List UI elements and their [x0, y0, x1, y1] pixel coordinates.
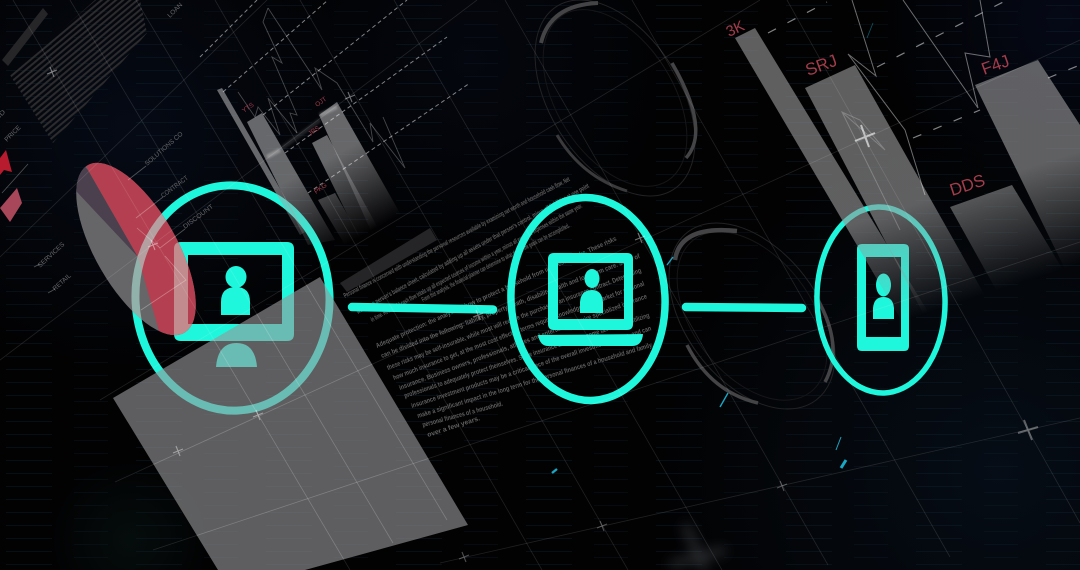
leader labels: RETAIL — [52, 272, 73, 292]
chart labels: 3K — [724, 17, 747, 41]
pie chart: tilted ellipse — [76, 162, 196, 336]
chart labels: SRJ — [803, 51, 840, 80]
leader labels: SERVICES — [37, 241, 67, 269]
text block: central paragraph: Personal finance is concerned with understanding the personal resources available by examining net worth and household cash flow. Net — [343, 176, 572, 300]
dashed chart guides — [200, 0, 1080, 193]
text block: central paragraph: how much insurance to get, at the most cost effective terms requires knowledge of the market for personal — [392, 281, 645, 382]
text block: central paragraph: can be divided into the following: liability, property, death, disability, health and long term care. Some of — [380, 253, 642, 360]
grid cross markers — [47, 67, 1038, 562]
chart labels — [241, 17, 1012, 200]
bar chart: right large — [735, 28, 1080, 340]
cyan sparks — [552, 23, 873, 473]
chart highlight bands — [267, 107, 337, 157]
node: laptop — [506, 194, 670, 404]
central paragraph header bar — [340, 228, 437, 292]
line chart: zigzags left — [238, 8, 405, 168]
ring: smartphone — [814, 205, 948, 395]
ring: laptop — [506, 194, 670, 404]
ring: desktop — [130, 180, 335, 416]
text block: central paragraph: these risks may be self-insurable, while most will require the purchase of an insurance contract. Determining — [386, 267, 642, 372]
chart labels: OJT — [314, 96, 328, 109]
leader labels: LOAN — [166, 2, 184, 19]
chart labels: DDS — [947, 171, 987, 200]
text block: central paragraph: in time. Household cash flow totals up all expected sources of income within a year, minus all expected expenses within the same year. — [370, 203, 584, 324]
node: desktop computer — [130, 180, 335, 416]
leader labels: DISCOUNT — [182, 203, 215, 231]
blurred cross glow — [670, 525, 725, 570]
chart labels: JRS — [307, 124, 322, 138]
text block: central paragraph: over a few years. — [426, 415, 481, 439]
text block: central paragraph: make a significant impact in the long term for the personal finances of a household and family — [417, 342, 653, 420]
text block: central paragraph — [343, 176, 653, 439]
icon: laptop — [538, 253, 643, 346]
connector: laptop to phone — [686, 307, 802, 308]
text block: central paragraph: From this analysis, the financial planner can determine to what degree the goals can be accomplished. — [421, 223, 571, 304]
red map fragments — [0, 150, 22, 222]
text block: central paragraph: professionals to adequately protect themselves. Since insurance also enjoys some tax benefits, utilizing — [403, 312, 651, 400]
leader labels: PRICE — [3, 124, 23, 143]
bar chart: left small — [217, 88, 405, 245]
line chart: zigzags right — [842, 0, 990, 230]
leader labels: CONTRACT — [160, 175, 190, 200]
icon: smartphone — [857, 244, 909, 351]
concentric ring: middle — [635, 192, 869, 440]
chart labels: YTS — [241, 101, 256, 115]
gray panel: large tilted square — [113, 277, 468, 570]
device network — [130, 180, 948, 416]
text block: central paragraph: insurance. Business owners, professionals, athletes and entertainers require specialized insurance — [398, 293, 648, 392]
leader labels — [0, 2, 215, 310]
text block: central paragraph: worth is a person's balance sheet, calculated by adding up all assets under that person's control, minus all liabilities at one point — [355, 183, 591, 316]
icon: desktop monitor — [174, 242, 294, 367]
node: smartphone — [814, 205, 948, 395]
leader labels: SOLUTIONS CO — [144, 131, 185, 168]
chart labels: F4J — [979, 51, 1012, 79]
text block: central paragraph: insurance investment products may be a critical piece of the overall investment planning, and can — [410, 325, 652, 410]
text block: central paragraph: personal finances of a household. — [422, 401, 504, 429]
connector: desktop to laptop — [352, 307, 493, 310]
text block: top left striped paragraph — [2, 0, 147, 143]
text block: central paragraph: Adequate protection: the analysis of how to protect a household from unforeseen risks. These risks — [375, 236, 618, 350]
chart labels: PKG — [313, 182, 328, 196]
concentric ring: top — [502, 0, 728, 224]
